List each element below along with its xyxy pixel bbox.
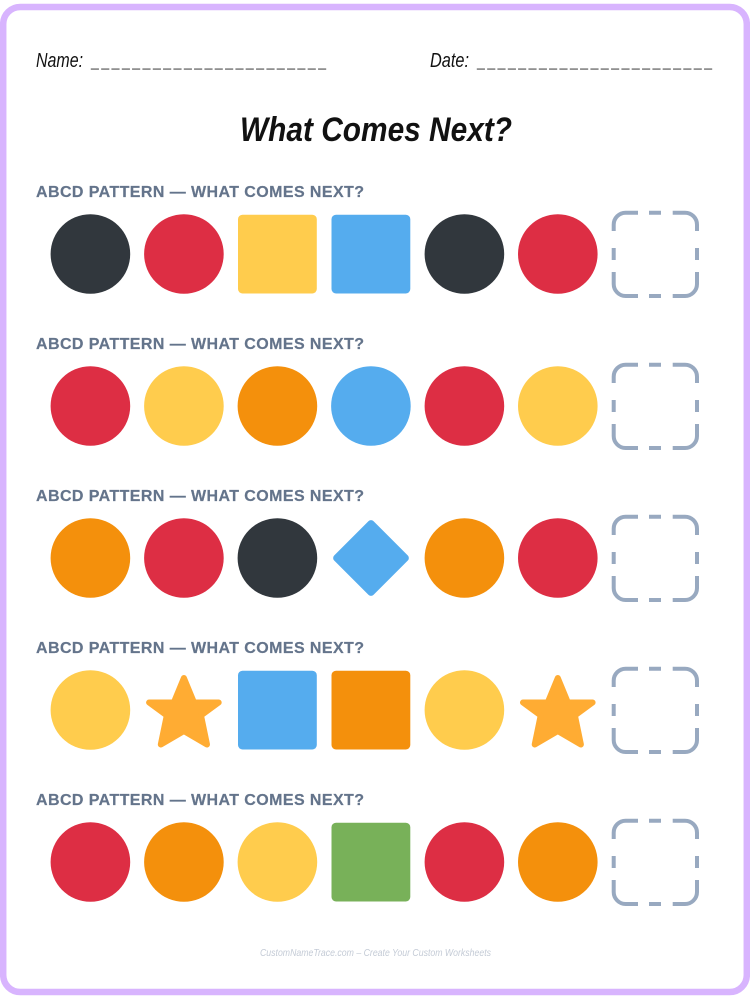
row 2 red circle — [51, 366, 130, 446]
row 2 blue circle — [331, 366, 411, 446]
row 4 orange star repeat — [523, 678, 593, 744]
date field — [430, 50, 712, 72]
row 1 empty answer box — [614, 213, 697, 296]
footer: CustomNameTrace.com – Create Your Custom Worksheets — [260, 947, 492, 959]
row 2 yellow circle repeat — [518, 366, 598, 446]
row 4 orange square — [332, 671, 410, 750]
row 3 heading: ABCD PATTERN — WHAT COMES NEXT? — [36, 488, 364, 505]
panel: row 2 — [36, 336, 697, 448]
row 5 yellow circle — [238, 822, 317, 902]
row 4 blue square — [238, 671, 317, 750]
row 4 heading: ABCD PATTERN — WHAT COMES NEXT? — [36, 640, 364, 657]
row 2 red circle repeat — [425, 366, 504, 446]
name field: Name: — [36, 50, 83, 72]
panel: row 5 — [36, 792, 697, 904]
row 3 orange circle repeat — [425, 518, 504, 598]
row 4 yellow circle repeat — [425, 670, 504, 750]
row 5 red circle — [51, 822, 130, 902]
row 3 red circle repeat — [518, 518, 598, 598]
row 5 red circle repeat — [425, 822, 504, 902]
row 3 blue diamond — [332, 519, 410, 597]
row 1 heading: ABCD PATTERN — WHAT COMES NEXT? — [36, 184, 364, 201]
row 5 orange circle repeat — [518, 822, 598, 902]
title: What Comes Next? — [240, 111, 512, 149]
panel: row 3 — [36, 488, 697, 600]
row 1 yellow square — [238, 215, 317, 294]
row 3 dark circle — [238, 518, 317, 598]
row 2 orange circle — [238, 366, 317, 446]
row 1 red circle repeat — [518, 214, 598, 294]
row 1 blue square — [332, 215, 410, 294]
panel: row 1 — [36, 184, 697, 296]
row 5 orange circle — [144, 822, 224, 902]
row 5 heading: ABCD PATTERN — WHAT COMES NEXT? — [36, 792, 364, 809]
date field: _______________________ — [476, 54, 712, 70]
row 2 empty answer box — [614, 365, 697, 448]
name field: _______________________ — [90, 54, 326, 70]
row 1 dark circle — [51, 214, 130, 294]
row 2 yellow circle — [144, 366, 224, 446]
row 1 dark circle repeat — [425, 214, 504, 294]
row 3 red circle — [144, 518, 224, 598]
row 5 green square — [332, 823, 410, 902]
date field: Date: — [430, 50, 469, 72]
row 3 empty answer box — [614, 517, 697, 600]
panel: row 4 — [36, 640, 697, 752]
row 4 yellow circle — [51, 670, 130, 750]
row 3 orange circle — [51, 518, 130, 598]
row 2 heading: ABCD PATTERN — WHAT COMES NEXT? — [36, 336, 364, 353]
row 5 empty answer box — [614, 821, 697, 904]
name field — [36, 50, 326, 72]
row 4 empty answer box — [614, 669, 697, 752]
row 4 orange star — [149, 678, 219, 744]
row 1 red circle — [144, 214, 224, 294]
